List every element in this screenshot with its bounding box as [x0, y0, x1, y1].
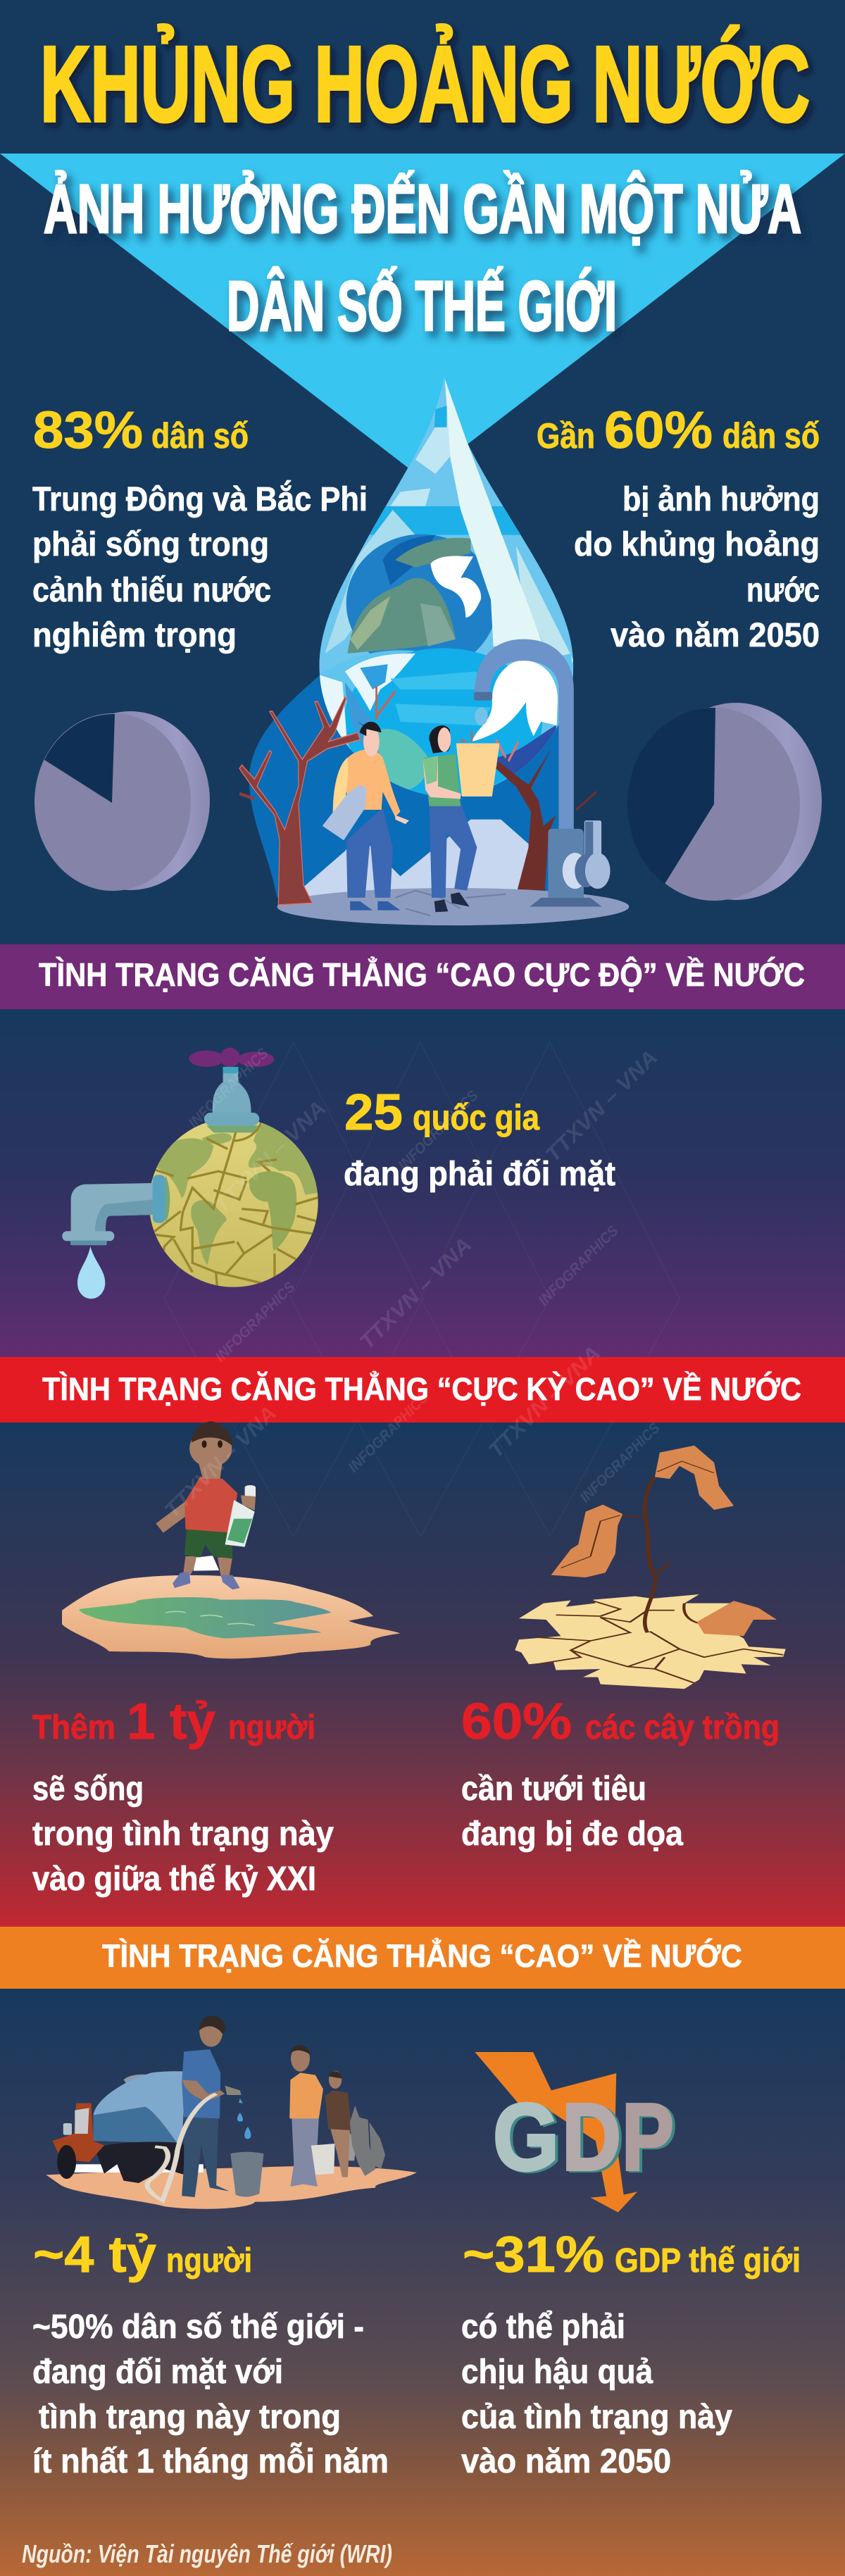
stat: 60% crops: 60% — [461, 1694, 572, 1750]
stat: 83% — [33, 401, 249, 459]
left tree — [239, 686, 395, 905]
stat: 4 billion — [33, 2227, 252, 2283]
text block: left — [32, 2308, 389, 2480]
text block: right: bị ảnh hưởng — [622, 481, 820, 518]
bucket — [230, 2152, 263, 2197]
watermarks: TTXVN – VNA — [356, 1233, 476, 1354]
section header: high — [0, 1927, 845, 1989]
watermarks: INFOGRAPHICS — [535, 1223, 622, 1309]
illustration: dry globe faucet — [62, 1048, 322, 1299]
text block: right — [574, 481, 820, 654]
man with hose — [147, 2015, 251, 2201]
text block: left: ~50% dân số thế giới - — [32, 2308, 364, 2346]
GDP letters — [493, 2084, 677, 2192]
text block: left: ít nhất 1 tháng mỗi năm — [32, 2442, 389, 2480]
section header: high: TÌNH TRẠNG CĂNG THẲNG “CAO” VỀ NƯỚC — [102, 1938, 742, 1974]
stat: 31% GDP: GDP thế giới — [615, 2242, 801, 2280]
GDP letters: P — [622, 2084, 674, 2190]
text block: right: nước — [746, 572, 820, 609]
text block: left: cảnh thiếu nước — [32, 572, 271, 609]
pie chart: 83% — [35, 711, 210, 891]
stat: 60% — [537, 401, 820, 459]
watermarks: TTXVN – VNA — [484, 1342, 605, 1463]
text block: left: nghiêm trọng — [32, 617, 237, 654]
text block: left — [32, 1770, 334, 1898]
illustration: water truck and people — [46, 2015, 417, 2209]
text block: right: đang bị đe dọa — [461, 1815, 683, 1853]
watermarks — [161, 1045, 663, 1523]
panel: very high stress — [32, 1421, 786, 1898]
pouring water — [472, 661, 558, 742]
ground cracks — [395, 891, 506, 915]
stat: 31% GDP: ~31% — [463, 2227, 604, 2283]
stat: 60% crops: các cây trồng — [585, 1709, 780, 1746]
text block: left: vào giữa thế kỷ XXI — [32, 1861, 316, 1898]
water drop with globe — [315, 366, 579, 804]
text block: left: trong tình trạng này — [32, 1815, 334, 1853]
text block: left: Trung Đông và Bắc Phi — [32, 480, 368, 518]
watermarks: TTXVN – VNA — [161, 1401, 281, 1523]
man with bag — [323, 722, 409, 911]
stat: 4 billion: người — [166, 2242, 252, 2280]
stat: 25: 25 — [344, 1084, 403, 1141]
stat: 25: quốc gia — [413, 1098, 540, 1137]
blue backdrop — [249, 675, 558, 898]
dying plant on cracked earth — [515, 1446, 786, 1689]
section header: very high: TÌNH TRẠNG CĂNG THẲNG “CỰC KỲ CAO” VỀ NƯỚC — [42, 1371, 801, 1407]
text block: right: của tình trạng này — [461, 2399, 732, 2436]
text block: right — [461, 1770, 683, 1853]
text block: left — [32, 480, 368, 654]
watermarks: INFOGRAPHICS — [212, 1279, 299, 1365]
watermarks: INFOGRAPHICS — [395, 1087, 482, 1174]
panel: hero — [0, 24, 845, 925]
faucet — [474, 650, 611, 907]
faucet spout — [62, 1175, 170, 1245]
source: Nguồn: Viện Tài nguyên Thế giới (WRI) — [22, 2539, 392, 2568]
illustration: water drop, people and faucet — [239, 366, 629, 925]
watermarks: TTXVN – VNA — [210, 1096, 330, 1218]
mountains — [303, 820, 529, 898]
text block: left: tình trạng này trong — [39, 2399, 341, 2436]
section header: extreme — [0, 944, 845, 1009]
text block: right: vào năm 2050 — [461, 2443, 671, 2480]
subtitle — [44, 170, 801, 346]
truck — [52, 2071, 204, 2183]
panel: 25 countries — [62, 1048, 615, 1299]
background child and people — [311, 2071, 385, 2177]
right tree — [496, 739, 596, 891]
stat: 60%: dân số — [722, 416, 820, 456]
stat: 83%: 83% — [33, 401, 143, 459]
water highlight — [445, 379, 542, 646]
watermarks: INFOGRAPHICS — [577, 1420, 663, 1506]
watermarks: INFOGRAPHICS — [345, 1389, 432, 1476]
triangle banner — [0, 154, 845, 479]
ground — [277, 888, 629, 925]
watermarks: INFOGRAPHICS — [185, 1045, 272, 1132]
text block: left: đang đối mặt với — [32, 2353, 283, 2391]
GDP letters: D — [565, 2085, 624, 2192]
stat: 60% crops — [461, 1694, 780, 1750]
child with shirt — [289, 2045, 323, 2187]
stat: 25 — [344, 1084, 540, 1141]
text block: left: phải sống trong — [32, 526, 269, 563]
text block: right: do khủng hoảng — [574, 526, 820, 563]
stat: 1 billion — [32, 1694, 315, 1750]
woman with bucket — [423, 725, 499, 912]
stat: 4 billion: ~4 tỷ — [33, 2227, 156, 2283]
stat: 60%: Gần — [537, 416, 595, 456]
illustrations: boy and dying plant — [62, 1421, 786, 1689]
text block: right: vào năm 2050 — [611, 617, 820, 654]
text block: right: có thể phải — [461, 2308, 625, 2346]
text block: right: cần tưới tiêu — [461, 1770, 646, 1808]
stat: 1 billion: người — [228, 1709, 315, 1746]
faucet top — [189, 1048, 274, 1132]
icon: water drop — [77, 1246, 105, 1299]
globe — [146, 1118, 322, 1287]
arrow — [475, 2052, 637, 2213]
pie chart: 60% — [627, 703, 822, 901]
GDP letters: G — [496, 2085, 562, 2192]
subtitle: DÂN SỐ THẾ GIỚI — [227, 266, 617, 346]
GDP letters: D — [562, 2084, 621, 2190]
stat: 60%: 60% — [604, 401, 713, 459]
text block: right: chịu hậu quả — [461, 2353, 653, 2391]
GDP letters: G — [493, 2084, 559, 2190]
stat: 31% GDP — [463, 2227, 801, 2283]
stat: 1 billion: 1 tỷ — [127, 1694, 215, 1750]
text block: right — [461, 2308, 732, 2480]
GDP letters: P — [625, 2085, 677, 2192]
stat: 1 billion: Thêm — [32, 1709, 115, 1746]
text block: đang phải đối mặt — [344, 1156, 615, 1193]
panel: high stress — [22, 2015, 801, 2568]
sand ground — [46, 2166, 417, 2209]
section header: very high — [0, 1357, 845, 1423]
illustration: falling GDP — [475, 2052, 677, 2213]
watermarks: TTXVN – VNA — [542, 1046, 662, 1167]
boy on dry land — [62, 1421, 401, 1658]
text block: left: sẽ sống — [32, 1770, 144, 1808]
stat: 83%: dân số — [151, 416, 249, 456]
